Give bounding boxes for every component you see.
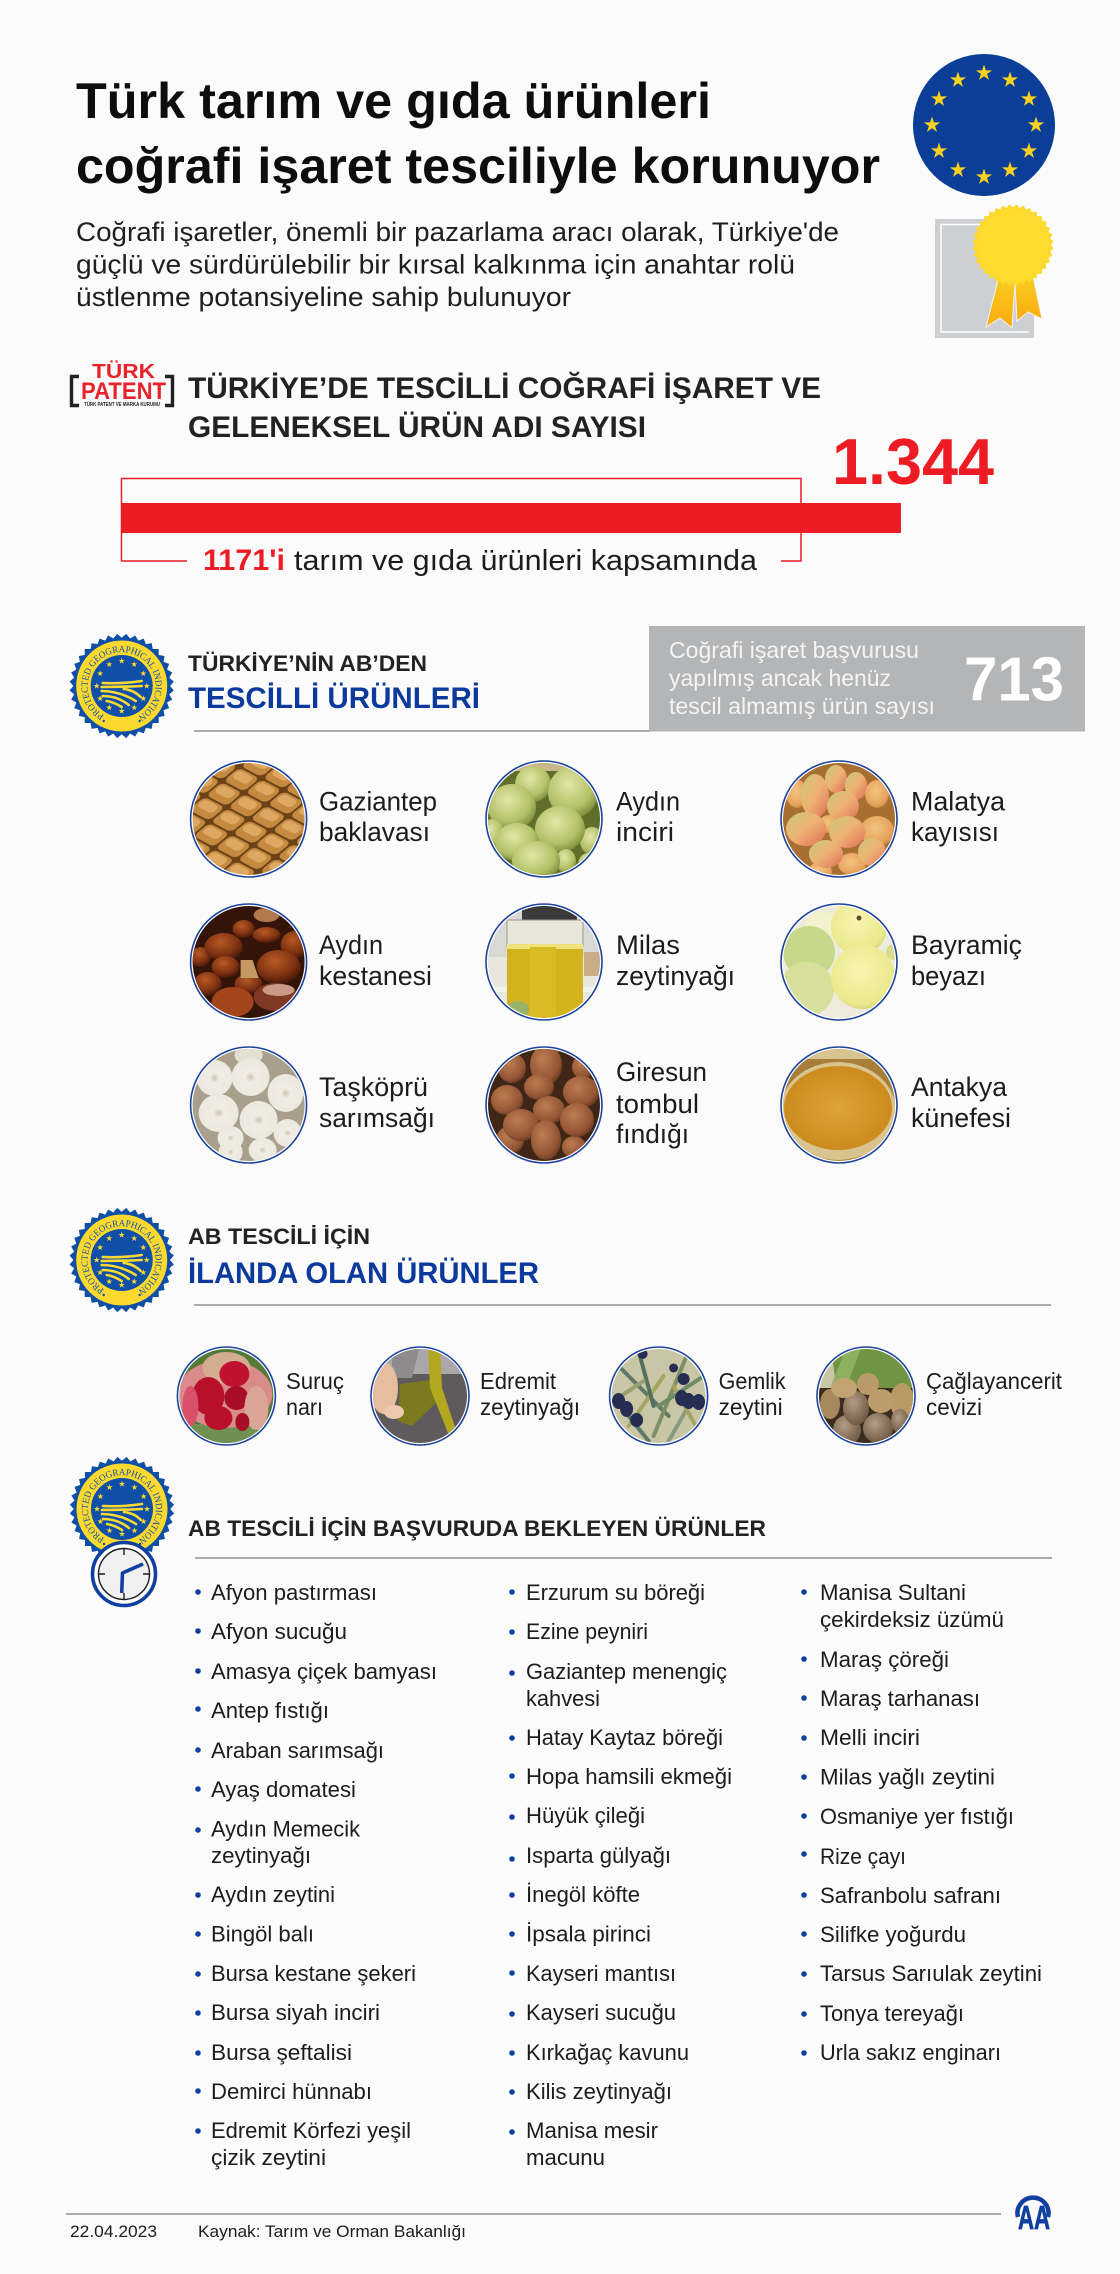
list: column 2: Isparta gülyağı xyxy=(526,1843,671,1868)
panel: products waiting in application xyxy=(70,1456,1052,2170)
list: column 1: zeytinyağı xyxy=(211,1843,311,1868)
icon: PGI badge with clock: PROTECTED GEOGRAPHICAL INDICATION xyxy=(82,1468,162,1544)
item: Gaziantep baklavası: Gaziantep xyxy=(319,786,437,816)
list: column 2: Hopa hamsili ekmeği xyxy=(526,1764,732,1789)
list: column 1: Ayaş domatesi xyxy=(211,1777,356,1802)
heading: registered products xyxy=(188,651,480,715)
heading: registered count xyxy=(188,371,821,444)
icon: PGI badge: PROTECTED GEOGRAPHICAL INDICATION xyxy=(81,1220,162,1296)
list: column 1: Demirci hünnabı xyxy=(211,2079,372,2104)
logo: Türk Patent: TÜRK xyxy=(92,360,156,383)
item: Milas zeytinyağı: Milas xyxy=(616,930,680,960)
list: column 3: Osmaniye yer fıstığı xyxy=(820,1804,1014,1829)
icon: PGI badge with clock xyxy=(70,1456,174,1608)
title: Türk tarım ve gıda ürünleri xyxy=(76,73,711,129)
item: Aydın kestanesi: kestanesi xyxy=(319,961,432,991)
list: column 3: Safranbolu safranı xyxy=(820,1883,1001,1908)
item: Malatya kayısısı: kayısısı xyxy=(911,817,999,847)
list: column 3: Maraş tarhanası xyxy=(820,1686,980,1711)
icon: PGI badge xyxy=(70,1208,174,1312)
heading: registered products: TESCİLLİ ÜRÜNLERİ xyxy=(188,682,480,715)
item: Bayramiç beyazı xyxy=(779,899,1022,1022)
icon: EU flag xyxy=(913,54,1055,196)
title: coğrafi işaret tesciliyle korunuyor xyxy=(76,138,880,194)
list: column 1: Bursa şeftalisi xyxy=(211,2040,352,2065)
list: column 2 xyxy=(509,1580,732,2170)
item: Giresun tombul fındığı: tombul xyxy=(616,1089,699,1119)
list: column 1: Araban sarımsağı xyxy=(211,1738,384,1763)
item: Aydın inciri xyxy=(480,759,680,881)
icon: PGI badge xyxy=(70,634,174,738)
item: Gemlik zeytini xyxy=(609,1346,786,1446)
item: Gaziantep baklavası xyxy=(189,759,437,879)
icon: PGI badge: PROTECTED GEOGRAPHICAL INDICATION xyxy=(81,646,162,722)
logo: Türk Patent xyxy=(72,360,172,408)
logo: Anadolu Agency xyxy=(1018,2198,1050,2236)
item: Suruç narı: Suruç xyxy=(286,1368,344,1394)
item: Gemlik zeytini: Gemlik xyxy=(719,1368,786,1394)
list: column 2: macunu xyxy=(526,2145,605,2170)
item: Suruç narı: narı xyxy=(286,1394,323,1420)
list: column 1: Amasya çiçek bamyası xyxy=(211,1659,437,1684)
item: Giresun tombul fındığı: fındığı xyxy=(616,1119,689,1149)
item: Milas zeytinyağı: zeytinyağı xyxy=(616,961,735,991)
bar chart: 1.344 total with 1171 bracket: 1.344 xyxy=(832,425,994,498)
list: column 2: kahvesi xyxy=(526,1686,600,1711)
list: column 3: Tonya tereyağı xyxy=(820,2001,964,2026)
item: Gaziantep baklavası: baklavası xyxy=(319,817,430,847)
list: column 2: Kayseri mantısı xyxy=(526,1961,676,1986)
intro text block xyxy=(76,217,839,312)
item: Gemlik zeytini: zeytini xyxy=(719,1394,783,1420)
list: column 3: Tarsus Sarıulak zeytini xyxy=(820,1961,1042,1986)
logo: Türk Patent: TÜRK PATENT VE MARKA KURUMU xyxy=(84,401,160,408)
callout: pending applications 713 xyxy=(649,626,1085,732)
item: Edremit zeytinyağı xyxy=(370,1346,580,1446)
heading: registered count: GELENEKSEL ÜRÜN ADI SAYISI xyxy=(188,411,646,444)
list: column 3: Rize çayı xyxy=(820,1844,906,1869)
item: Aydın kestanesi xyxy=(189,902,432,1022)
list: column 3: Melli inciri xyxy=(820,1725,920,1750)
list: column 1: Bursa kestane şekeri xyxy=(211,1961,416,1986)
list: column 1: Antep fıstığı xyxy=(211,1698,329,1723)
panel: products in announcement xyxy=(70,1208,1063,1446)
item: Edremit zeytinyağı: Edremit xyxy=(480,1368,557,1394)
heading: pending application: AB TESCİLİ İÇİN BAŞVURUDA BEKLEYEN ÜRÜNLER xyxy=(188,1516,766,1541)
list: column 3: Maraş çöreği xyxy=(820,1647,949,1672)
item: Çağlayancerit cevizi xyxy=(816,1346,1063,1446)
list: column 1: Afyon sucuğu xyxy=(211,1619,347,1644)
item: Taşköprü sarımsağı: Taşköprü xyxy=(319,1072,428,1102)
list: column 1: Afyon pastırması xyxy=(211,1580,377,1605)
list: column 2: Hatay Kaytaz böreği xyxy=(526,1725,723,1750)
item: Aydın inciri: Aydın xyxy=(616,786,680,816)
callout: pending applications 713: tescil almamış ürün sayısı xyxy=(669,693,935,719)
heading: registered count: TÜRKİYE’DE TESCİLLİ COĞRAFİ İŞARET VE xyxy=(188,371,821,405)
list: column 1: Aydın Memecik xyxy=(211,1816,361,1842)
logo: Anadolu Agency: AA xyxy=(1018,2199,1050,2236)
list: column 2: Manisa mesir xyxy=(526,2118,658,2143)
list: column 1: Aydın zeytini xyxy=(211,1882,335,1907)
heading: in announcement xyxy=(188,1224,539,1290)
list: column 2: Kayseri sucuğu xyxy=(526,2000,676,2025)
item: Malatya kayısısı xyxy=(779,759,1006,882)
callout: pending applications 713: yapılmış ancak henüz xyxy=(669,665,891,691)
intro text block: Coğrafi işaretler, önemli bir pazarlama aracı olarak, Türkiye'de xyxy=(76,217,839,247)
list: column 2: İnegöl köfte xyxy=(526,1882,640,1907)
list: column 2: Kilis zeytinyağı xyxy=(526,2079,672,2104)
list: column 2: Erzurum su böreği xyxy=(526,1580,705,1605)
list: column 3: Silifke yoğurdu xyxy=(820,1922,966,1947)
intro text block: güçlü ve sürdürülebilir bir kırsal kalkınma için anahtar rolü xyxy=(76,250,795,280)
item: Aydın kestanesi: Aydın xyxy=(319,930,383,960)
list: column 3 xyxy=(801,1580,1042,2065)
item: Antakya künefesi: Antakya xyxy=(911,1072,1008,1102)
list: column 3: Urla sakız enginarı xyxy=(820,2040,1001,2065)
list: column 1: Bingöl balı xyxy=(211,1922,314,1946)
footer: date and source: Kaynak: Tarım ve Orman Bakanlığı xyxy=(198,2222,466,2241)
list: column 2: Kırkağaç kavunu xyxy=(526,2040,689,2065)
item: Suruç narı xyxy=(176,1346,344,1446)
heading: in announcement: İLANDA OLAN ÜRÜNLER xyxy=(188,1257,539,1290)
item: Antakya künefesi xyxy=(779,1045,1011,1165)
panel: registered EU products xyxy=(70,626,1085,1164)
item: Giresun tombul fındığı: Giresun xyxy=(616,1057,707,1087)
heading: in announcement: AB TESCİLİ İÇİN xyxy=(188,1224,370,1249)
item: Malatya kayısısı: Malatya xyxy=(911,786,1006,816)
list: column 3: çekirdeksiz üzümü xyxy=(820,1607,1004,1632)
bar chart: 1.344 total with 1171 bracket: 1171'i xyxy=(203,544,285,577)
item: Çağlayancerit cevizi: Çağlayancerit xyxy=(926,1368,1063,1394)
list: column 3: Milas yağlı zeytini xyxy=(820,1764,995,1790)
callout: pending applications 713: Coğrafi işaret başvurusu xyxy=(669,637,919,663)
item: Bayramiç beyazı: Bayramiç xyxy=(911,930,1022,960)
heading: registered products: TÜRKİYE’NİN AB’DEN xyxy=(188,651,427,676)
item: Taşköprü sarımsağı: sarımsağı xyxy=(319,1103,435,1133)
item: Bayramiç beyazı: beyazı xyxy=(911,961,986,991)
list: column 3: Manisa Sultani xyxy=(820,1580,966,1605)
icon: certificate with gold seal xyxy=(935,204,1054,338)
list: column 1: Bursa siyah inciri xyxy=(211,2000,380,2025)
title xyxy=(76,73,880,194)
item: Edremit zeytinyağı: zeytinyağı xyxy=(480,1394,580,1420)
footer: date and source xyxy=(70,2222,466,2241)
callout: pending applications 713: 713 xyxy=(964,646,1064,714)
item: Taşköprü sarımsağı xyxy=(189,1045,435,1165)
logo: Türk Patent: PATENT xyxy=(81,378,166,405)
list: column 2: Ezine peyniri xyxy=(526,1619,648,1644)
item: Giresun tombul fındığı xyxy=(484,1045,707,1165)
bar chart: 1.344 total with 1171 bracket: tarım ve gıda ürünleri kapsamında xyxy=(294,545,758,577)
item: Çağlayancerit cevizi: cevizi xyxy=(926,1394,982,1420)
footer: date and source: 22.04.2023 xyxy=(70,2222,157,2241)
list: column 2: İpsala pirinci xyxy=(526,1922,651,1946)
item: Milas zeytinyağı xyxy=(484,902,735,1022)
list: column 1: Edremit Körfezi yeşil xyxy=(211,2118,411,2143)
list: column 1: çizik zeytini xyxy=(211,2145,326,2170)
list: column 1 xyxy=(195,1580,437,2170)
list: column 2: Hüyük çileği xyxy=(526,1803,645,1828)
list: column 2: Gaziantep menengiç xyxy=(526,1659,727,1684)
bar chart: 1.344 total with 1171 bracket xyxy=(121,425,994,577)
item: Antakya künefesi: künefesi xyxy=(911,1103,1011,1133)
intro text block: üstlenme potansiyeline sahip bulunuyor xyxy=(76,282,571,312)
item: Aydın inciri: inciri xyxy=(616,817,674,847)
